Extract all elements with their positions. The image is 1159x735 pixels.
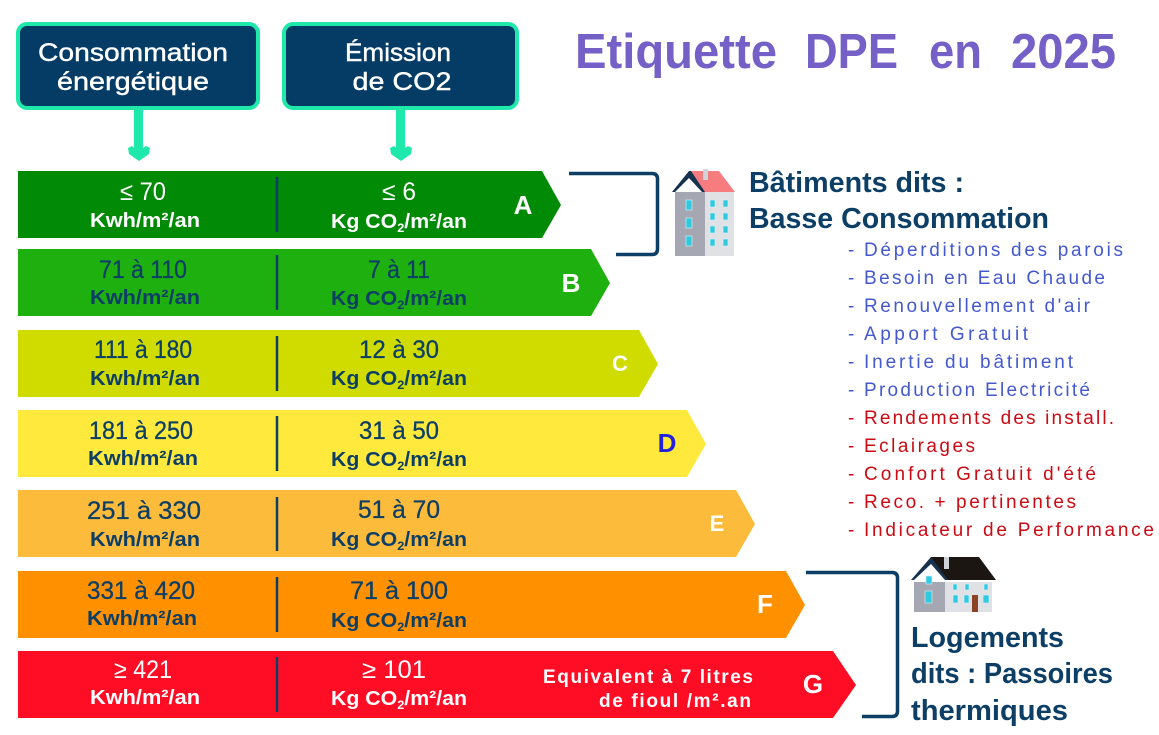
callout: fuel equivalent: de fioul /m².an — [599, 691, 751, 712]
icon: house — [911, 557, 996, 612]
list: criteria: Confort Gratuit d'été — [864, 464, 1096, 485]
band C: Kwh/m²/an — [90, 368, 200, 390]
band A: A — [514, 190, 533, 220]
band B: 2 — [397, 298, 405, 312]
heading: thermal sieves — [911, 622, 1113, 727]
band E: /m²/an — [404, 529, 467, 551]
arrow: consumption — [128, 108, 150, 161]
band G: ≥ 101 — [362, 656, 426, 684]
band F: F — [757, 589, 773, 619]
band E: 251 à 330 — [87, 497, 201, 525]
band F: Kg CO — [331, 610, 393, 632]
icon: apartment building — [672, 169, 735, 256]
title: 2025 — [1011, 25, 1116, 79]
header: consumption — [18, 24, 258, 108]
heading: low consumption buildings — [749, 167, 1049, 235]
band A: ≤ 70 — [120, 178, 166, 206]
band E: Kwh/m²/an — [90, 529, 200, 551]
band E — [18, 490, 755, 557]
band G: ≥ 421 — [114, 656, 172, 684]
list: criteria: - — [848, 268, 854, 289]
list: criteria: - — [848, 380, 854, 401]
band E: Kg CO — [331, 529, 393, 551]
band D: D — [658, 428, 676, 458]
band B — [18, 249, 610, 316]
list: criteria: Rendements des install. — [864, 408, 1114, 429]
band F: 2 — [397, 620, 405, 634]
band B: B — [562, 268, 580, 298]
band G — [18, 651, 856, 718]
band A: Kwh/m²/an — [90, 210, 200, 232]
bracket: thermal sieves — [806, 572, 898, 716]
list: criteria — [848, 240, 1154, 541]
band D: Kg CO — [331, 449, 393, 471]
band C: 12 à 30 — [359, 336, 439, 364]
band A: Kg CO — [331, 211, 393, 233]
title: Etiquette — [575, 25, 777, 79]
band A: 2 — [397, 221, 405, 235]
band B: 71 à 110 — [99, 256, 187, 284]
title: en — [929, 25, 982, 79]
band B: 7 à 11 — [368, 256, 430, 284]
band G: /m²/an — [404, 688, 467, 710]
band C: 111 à 180 — [94, 336, 192, 364]
list: criteria: - — [848, 240, 854, 261]
band E: E — [710, 511, 724, 536]
header: consumption: énergétique — [57, 68, 209, 96]
title: DPE — [805, 25, 898, 79]
list: criteria: - — [848, 464, 854, 485]
band D — [18, 410, 706, 477]
list: criteria: - — [848, 324, 854, 345]
list: criteria: - — [848, 352, 854, 373]
arrow: emission — [390, 108, 412, 161]
list: criteria: - — [848, 408, 854, 429]
band E: 51 à 70 — [358, 496, 440, 524]
band G: Kg CO — [331, 688, 393, 710]
band B: /m²/an — [404, 288, 467, 310]
band C — [18, 330, 658, 397]
band B: Kg CO — [331, 288, 393, 310]
band A: ≤ 6 — [382, 178, 416, 206]
bracket: low consumption — [569, 174, 658, 254]
list: criteria: Production Electricité — [864, 380, 1090, 401]
band G: 2 — [397, 698, 405, 712]
band A: /m²/an — [404, 211, 467, 233]
band C: /m²/an — [404, 368, 467, 390]
band D: 31 à 50 — [359, 417, 439, 445]
band E: 2 — [397, 539, 405, 553]
header: consumption: Consommation — [38, 39, 228, 67]
list: criteria: Reco. + pertinentes — [864, 492, 1076, 513]
list: criteria: - — [848, 436, 854, 457]
band F: /m²/an — [404, 610, 467, 632]
band D: 181 à 250 — [89, 417, 193, 445]
band G: G — [803, 669, 823, 699]
list: criteria: Apport Gratuit — [864, 324, 1029, 345]
heading: low consumption buildings: Basse Consommation — [749, 203, 1049, 235]
list: criteria: Eclairages — [864, 436, 975, 457]
callout: fuel equivalent: Equivalent à 7 litres — [543, 667, 753, 688]
header: emission — [284, 24, 517, 108]
title — [575, 25, 1116, 79]
list: criteria: - — [848, 520, 854, 541]
band F: 71 à 100 — [350, 577, 448, 605]
band B: Kwh/m²/an — [90, 287, 200, 309]
band D: /m²/an — [404, 449, 467, 471]
band G: Kwh/m²/an — [90, 687, 200, 709]
heading: thermal sieves: thermiques — [911, 695, 1068, 727]
heading: thermal sieves: dits : Passoires — [911, 658, 1113, 690]
list: criteria: Déperditions des parois — [864, 240, 1123, 261]
band F: Kwh/m²/an — [87, 608, 197, 630]
list: criteria: Renouvellement d'air — [864, 296, 1091, 317]
band C: C — [612, 351, 628, 376]
heading: thermal sieves: Logements — [911, 622, 1064, 654]
band F: 331 à 420 — [87, 577, 195, 605]
band D: Kwh/m²/an — [88, 448, 198, 470]
band C: Kg CO — [331, 368, 393, 390]
list: criteria: - — [848, 296, 854, 317]
band D: 2 — [397, 459, 405, 473]
band F — [18, 571, 805, 638]
header: emission: de CO2 — [352, 68, 452, 96]
list: criteria: Indicateur de Performance — [864, 520, 1154, 541]
header: emission: Émission — [345, 38, 451, 67]
callout: fuel equivalent — [543, 667, 753, 712]
band A — [18, 171, 561, 238]
heading: low consumption buildings: Bâtiments dits : — [749, 167, 964, 199]
list: criteria: Besoin en Eau Chaude — [864, 268, 1105, 289]
list: criteria: - — [848, 492, 854, 513]
list: criteria: Inertie du bâtiment — [864, 352, 1074, 373]
band C: 2 — [397, 378, 405, 392]
